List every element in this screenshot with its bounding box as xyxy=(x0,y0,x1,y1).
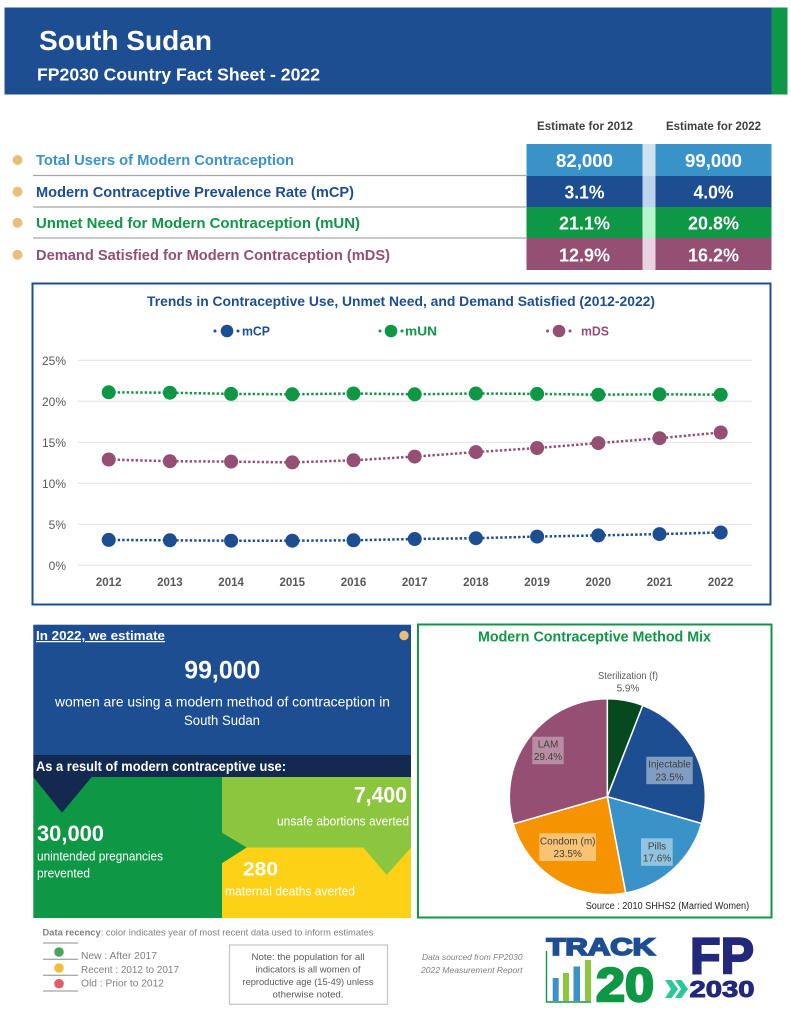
series: mCP xyxy=(102,526,728,548)
row: mDS: 16.2% xyxy=(688,244,739,266)
row: mCP: 4.0% xyxy=(694,182,734,202)
panel heading: In 2022, we estimate xyxy=(36,629,165,643)
label: condom: Condom (m) xyxy=(540,836,595,847)
block: unintended pregnancies: prevented xyxy=(37,867,90,881)
row: mDS: Demand Satisfied for Modern Contraception (mDS) xyxy=(36,247,390,264)
data source note: 2022 Measurement Report xyxy=(420,965,523,975)
label: LAM: LAM xyxy=(538,740,558,750)
label: sterilization xyxy=(598,671,658,694)
x axis labels: 2020 xyxy=(586,577,611,589)
logo: FP2030: 2030 xyxy=(690,976,754,1002)
pie title: Modern Contraceptive Method Mix xyxy=(478,630,711,646)
row: mUN: Unmet Need for Modern Contraception (mUN) xyxy=(36,215,360,232)
x axis labels: 2022 xyxy=(708,577,733,589)
panel: method mix pie chart xyxy=(418,624,772,918)
icon: chevrons xyxy=(665,980,678,998)
data recency legend xyxy=(42,928,374,991)
x axis labels xyxy=(96,577,733,589)
panel: 2022 estimate xyxy=(33,625,411,755)
x axis labels: 2015 xyxy=(280,577,306,589)
block: unintended pregnancies xyxy=(33,777,247,918)
label: sterilization: Sterilization (f) xyxy=(598,671,658,682)
x axis labels: 2013 xyxy=(157,577,183,589)
row: mCP xyxy=(12,176,772,207)
block: maternal deaths xyxy=(222,847,411,918)
dark band heading xyxy=(33,755,411,778)
note box: Note: the population for all xyxy=(252,952,364,963)
label: condom xyxy=(539,833,596,861)
column heading: 2022: Estimate for 2022 xyxy=(666,121,761,133)
description: women are using a modern method of contraception in xyxy=(54,695,390,710)
row: total users: 82,000 xyxy=(556,150,613,171)
y axis labels: 15% xyxy=(42,436,66,450)
description xyxy=(54,695,390,728)
logo: Track20: TRACK xyxy=(546,934,655,961)
x axis labels: 2016 xyxy=(341,577,366,589)
recency: recent: Recent : 2012 to 2017 xyxy=(81,964,179,976)
legend xyxy=(214,324,609,338)
source: Source : 2010 SHHS2 (Married Women) xyxy=(586,901,749,912)
block: maternal deaths: 280 xyxy=(243,860,278,881)
block: unintended pregnancies: 30,000 xyxy=(37,821,104,846)
header banner xyxy=(4,8,788,94)
data source note xyxy=(420,952,523,975)
description: South Sudan xyxy=(184,713,260,728)
y axis labels: 10% xyxy=(42,477,66,491)
y axis labels: 5% xyxy=(49,518,66,532)
row: total users xyxy=(12,144,772,176)
pie slices xyxy=(509,699,705,895)
note box: reproductive age (15-49) unless xyxy=(242,977,374,988)
logo: FP2030 xyxy=(665,928,754,1002)
label: LAM xyxy=(532,737,564,764)
row: mDS: 12.9% xyxy=(559,244,610,266)
block: maternal deaths: maternal deaths averted xyxy=(225,885,355,899)
data source note: Data sourced from FP2030 xyxy=(422,952,523,962)
x axis labels: 2021 xyxy=(647,577,673,589)
legend: mUN xyxy=(405,324,437,338)
logo: FP2030: FP xyxy=(690,928,754,984)
label: pills: Pills xyxy=(648,841,666,852)
y axis labels: 20% xyxy=(42,395,66,409)
indicator table xyxy=(12,121,772,270)
y axis labels xyxy=(42,354,66,573)
title: South Sudan xyxy=(39,25,212,56)
logo: Track20: 20 xyxy=(596,958,654,1011)
x axis labels: 2017 xyxy=(402,577,427,589)
label: injectable xyxy=(646,757,693,784)
label: injectable: Injectable xyxy=(648,760,691,771)
x axis labels: 2018 xyxy=(463,577,489,589)
label: sterilization: 5.9% xyxy=(617,684,640,694)
panel: impact of contraceptive use xyxy=(33,755,411,918)
data recency legend: Data recency: color indicates year of most recent data used to inform estimates xyxy=(42,928,374,939)
row: mUN: 21.1% xyxy=(559,212,610,234)
label: LAM: 29.4% xyxy=(534,752,562,763)
row: mUN: 20.8% xyxy=(688,212,739,234)
series: mUN xyxy=(102,385,728,402)
label: pills: 17.6% xyxy=(643,854,671,865)
recency: new: New : After 2017 xyxy=(81,950,157,962)
block: unintended pregnancies: unintended pregnancies xyxy=(37,850,163,864)
row: mCP: Modern Contraceptive Prevalence Rate (mCP) xyxy=(36,184,354,201)
block: unsafe abortions xyxy=(222,777,411,875)
legend: mCP xyxy=(242,324,270,338)
recency: old: Old : Prior to 2012 xyxy=(81,978,164,990)
y axis labels: 0% xyxy=(49,559,66,573)
row: mUN xyxy=(12,207,772,238)
dark band heading: As a result of modern contraceptive use: xyxy=(36,759,286,774)
big number: 99,000 xyxy=(184,657,260,685)
block: unsafe abortions: 7,400 xyxy=(354,783,407,808)
column heading: 2012: Estimate for 2012 xyxy=(537,121,633,133)
label: injectable: 23.5% xyxy=(655,772,684,784)
panel: trends line chart xyxy=(32,284,770,604)
row: mCP: 3.1% xyxy=(564,182,604,202)
y axis labels: 25% xyxy=(42,354,66,368)
block: unsafe abortions: unsafe abortions averted xyxy=(277,815,409,829)
note box: indicators is all women of xyxy=(256,964,361,976)
recency dot xyxy=(399,631,409,640)
x axis labels: 2014 xyxy=(218,577,244,589)
x axis labels: 2019 xyxy=(524,577,550,589)
x axis labels: 2012 xyxy=(96,577,121,589)
series: mDS xyxy=(102,426,728,469)
label: condom: 23.5% xyxy=(554,849,582,860)
label: pills xyxy=(641,838,673,866)
note box: otherwise noted. xyxy=(272,990,344,1000)
recency: new xyxy=(54,947,157,962)
row: mDS xyxy=(12,238,772,270)
row: total users: 99,000 xyxy=(685,150,742,171)
chart title: Trends in Contraceptive Use, Unmet Need, and Demand Satisfied (2012-2022) xyxy=(147,294,655,309)
subtitle: FP2030 Country Fact Sheet - 2022 xyxy=(37,65,320,85)
row: total users: Total Users of Modern Contraception xyxy=(36,152,294,169)
note box xyxy=(230,945,388,1004)
legend: mDS xyxy=(581,324,609,338)
logo: Track20 xyxy=(546,934,655,1011)
